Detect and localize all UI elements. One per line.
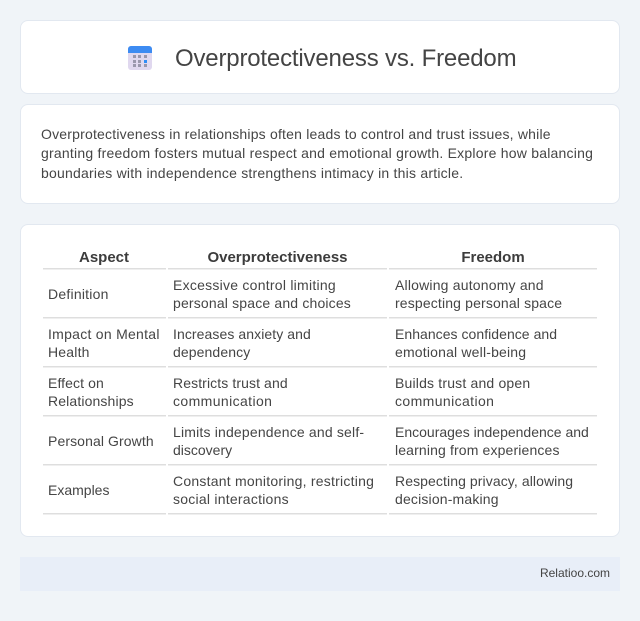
row: effect on relationships: communication bbox=[395, 393, 494, 409]
row: examples: Examples bbox=[48, 482, 109, 498]
table header bbox=[79, 249, 525, 266]
icon: calendar bbox=[128, 46, 152, 70]
row: examples: Constant monitoring, restricting bbox=[173, 473, 374, 489]
intro text: Overprotectiveness in relationships often leads to control and trust issues, while bbox=[41, 126, 551, 142]
row: definition: personal space and choices bbox=[173, 295, 351, 311]
row: personal growth: Encourages independence and bbox=[395, 424, 589, 440]
row: personal growth: Personal Growth bbox=[48, 433, 154, 449]
comparison table panel bbox=[20, 224, 620, 537]
row: examples: decision-making bbox=[395, 491, 499, 507]
footer text: Relatioo.com: Relatioo.com bbox=[540, 566, 610, 580]
row: impact on mental health: dependency bbox=[173, 344, 250, 360]
row: personal growth bbox=[48, 424, 589, 458]
intro text: boundaries with independence strengthens intimacy in this article. bbox=[41, 165, 463, 181]
row: examples: social interactions bbox=[173, 491, 289, 507]
row: effect on relationships: Effect on bbox=[48, 375, 104, 391]
table header: Freedom bbox=[461, 249, 525, 266]
row: definition: Definition bbox=[48, 286, 109, 302]
table header: Overprotectiveness bbox=[207, 249, 348, 266]
intro text bbox=[41, 126, 593, 181]
row: impact on mental health: Enhances confidence and bbox=[395, 326, 557, 342]
intro panel bbox=[20, 104, 620, 204]
row: effect on relationships bbox=[48, 375, 530, 409]
row: definition bbox=[48, 277, 562, 311]
row: effect on relationships: communication bbox=[173, 393, 272, 409]
row: examples: Respecting privacy, allowing bbox=[395, 473, 573, 489]
row: effect on relationships: Restricts trust and bbox=[173, 375, 288, 391]
footer bar bbox=[20, 557, 620, 591]
intro text: granting freedom fosters mutual respect and emotional growth. Explore how balancing bbox=[41, 145, 593, 161]
row: personal growth: discovery bbox=[173, 442, 232, 458]
row: definition: Excessive control limiting bbox=[173, 277, 336, 293]
row: definition: Allowing autonomy and bbox=[395, 277, 544, 293]
header panel bbox=[20, 20, 620, 94]
title: Overprotectiveness vs. Freedom bbox=[175, 45, 516, 72]
row: personal growth: learning from experiences bbox=[395, 442, 560, 458]
row: effect on relationships: Relationships bbox=[48, 393, 134, 409]
row: impact on mental health: Health bbox=[48, 344, 90, 360]
row: effect on relationships: Builds trust and open bbox=[395, 375, 530, 391]
row: definition: respecting personal space bbox=[395, 295, 562, 311]
row: impact on mental health: Impact on Mental bbox=[48, 326, 160, 342]
row: examples bbox=[48, 473, 573, 507]
row: impact on mental health: Increases anxiety and bbox=[173, 326, 311, 342]
table header: Aspect bbox=[79, 249, 129, 266]
row: personal growth: Limits independence and self- bbox=[173, 424, 364, 440]
row: impact on mental health bbox=[48, 326, 557, 360]
row: impact on mental health: emotional well-being bbox=[395, 344, 526, 360]
